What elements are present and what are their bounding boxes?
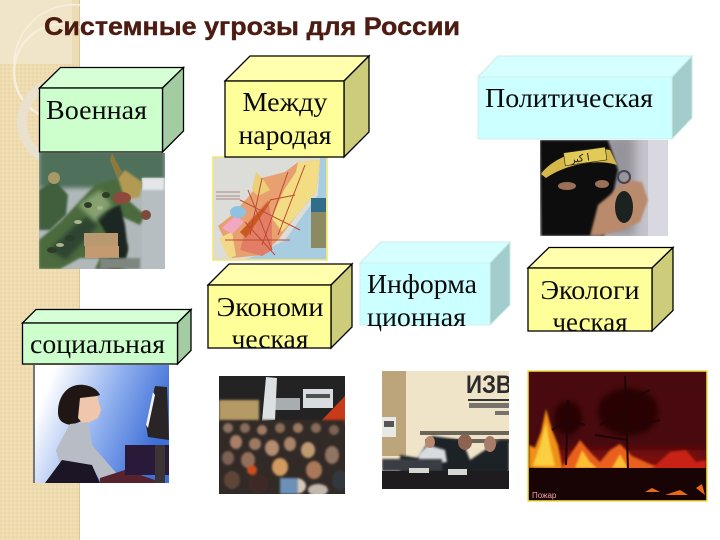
box: Между народая: Между	[242, 87, 328, 117]
photo: crowd rally	[219, 376, 348, 496]
box: Экологическая	[528, 248, 673, 337]
photo: map	[213, 157, 327, 260]
box: Информационная: Информа	[367, 269, 477, 299]
photo: masked man with grenade	[540, 135, 668, 236]
box: Между народая	[225, 56, 369, 157]
title: Системные угрозы для России	[44, 13, 460, 41]
box: Политическая: Политическая	[485, 83, 653, 113]
box: Экономическая: ческая	[232, 324, 308, 354]
box: Военная: Военная	[46, 95, 147, 125]
box: социальная	[22, 310, 191, 364]
box: Информационная: ционная	[367, 302, 466, 332]
photo: press conference	[382, 371, 512, 489]
box: Информационная	[360, 242, 510, 332]
photo: press conference: ИЗВ	[466, 371, 512, 399]
photo: masked man with grenade: ﺍ ﻛﺒﺮ	[569, 152, 590, 166]
decorative side band	[0, 0, 80, 540]
photo: forest fire: Пожар	[532, 491, 557, 500]
box: Экологическая: Экологи	[540, 275, 640, 305]
box: Экономическая: Экономи	[216, 292, 324, 322]
box: Военная	[40, 68, 184, 152]
box: Политическая	[478, 56, 692, 139]
box: Экологическая: ческая	[552, 307, 628, 337]
photo: soldier breaking bricks	[39, 150, 165, 269]
box: Между народая: народая	[238, 120, 332, 150]
box: социальная: социальная	[30, 329, 165, 359]
photo: child at computer	[33, 365, 169, 483]
box: Экономическая	[208, 264, 352, 354]
photo: forest fire	[528, 371, 707, 501]
